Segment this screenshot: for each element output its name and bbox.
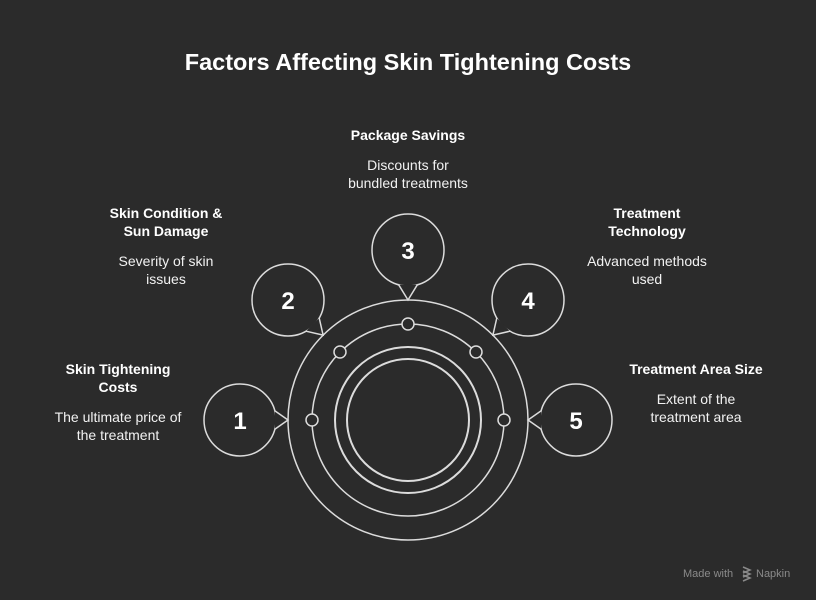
title: Factors Affecting Skin Tightening Costs	[185, 49, 631, 75]
text: skin condition: issues	[146, 271, 186, 287]
text: skin condition	[110, 205, 222, 287]
text: treatment technology: Treatment	[614, 205, 681, 221]
text: treatment area size: Extent of the	[657, 391, 736, 407]
bubble 1	[204, 384, 288, 456]
bubble 5: 5	[569, 408, 583, 435]
text: package savings: Package Savings	[351, 127, 465, 143]
bubble 3	[372, 214, 444, 300]
bubble 5	[528, 384, 612, 456]
text: treatment area size: Treatment Area Size	[629, 361, 763, 377]
text: skin condition: Sun Damage	[124, 223, 209, 239]
text: treatment area size	[629, 361, 763, 425]
text: treatment technology: Technology	[608, 223, 686, 239]
central diagram rings	[288, 300, 528, 540]
text: skin tightening costs: Costs	[99, 379, 138, 395]
text: skin tightening costs: the treatment	[77, 427, 159, 443]
text: treatment technology: Advanced methods	[587, 253, 707, 269]
bubble 2: 2	[281, 288, 295, 315]
text: treatment area size: treatment area	[650, 409, 742, 425]
footer watermark	[683, 567, 790, 581]
text: skin tightening costs	[55, 361, 182, 443]
text: treatment technology	[587, 205, 707, 287]
bubble 1: 1	[233, 408, 247, 435]
text: package savings: bundled treatments	[348, 175, 468, 191]
bubble 4: 4	[521, 288, 535, 315]
text: treatment technology: used	[632, 271, 662, 287]
text: skin tightening costs: Skin Tightening	[66, 361, 170, 377]
bubble 2	[252, 264, 324, 336]
text: package savings: Discounts for	[367, 157, 449, 173]
footer watermark: Made with	[683, 568, 733, 580]
bubble 3: 3	[401, 238, 415, 265]
bubble 4	[492, 264, 564, 336]
text: skin tightening costs: The ultimate price of	[55, 409, 182, 425]
text: skin condition: Skin Condition &	[110, 205, 222, 221]
text: package savings	[348, 127, 468, 191]
text: skin condition: Severity of skin	[119, 253, 213, 269]
footer watermark: Napkin	[756, 568, 790, 580]
